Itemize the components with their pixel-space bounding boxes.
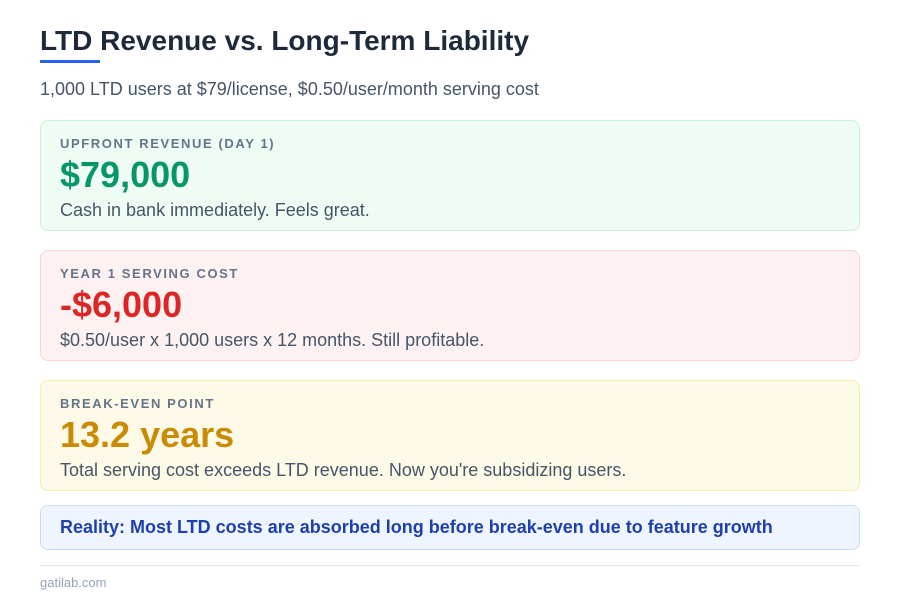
panel: year 1 cost xyxy=(40,250,860,361)
title underline xyxy=(40,60,100,63)
panel: year 1 cost: $0.50/user x 1,000 users x 12 months. Still profitable. xyxy=(60,330,484,350)
footer xyxy=(40,565,860,590)
panel: upfront revenue: $79,000 xyxy=(60,154,190,195)
panel: break-even: BREAK-EVEN POINT xyxy=(60,396,215,411)
subtitle: 1,000 LTD users at $79/license, $0.50/user/month serving cost xyxy=(40,79,539,99)
panel: break-even xyxy=(40,380,860,491)
title: LTD Revenue vs. Long-Term Liability xyxy=(40,25,529,56)
panel: upfront revenue: Cash in bank immediately. Feels great. xyxy=(60,200,370,220)
panel: upfront revenue xyxy=(40,120,860,231)
callout: reality xyxy=(40,505,860,550)
callout: reality: Reality: Most LTD costs are absorbed long before break-even due to feature growth xyxy=(60,517,773,537)
footer: gatilab.com xyxy=(40,575,106,590)
panel: year 1 cost: -$6,000 xyxy=(60,284,182,325)
panel: upfront revenue: UPFRONT REVENUE (DAY 1) xyxy=(60,136,275,151)
panel: break-even: 13.2 years xyxy=(60,414,234,455)
panel: year 1 cost: YEAR 1 SERVING COST xyxy=(60,266,239,281)
panel: break-even: Total serving cost exceeds LTD revenue. Now you're subsidizing users. xyxy=(60,460,626,480)
